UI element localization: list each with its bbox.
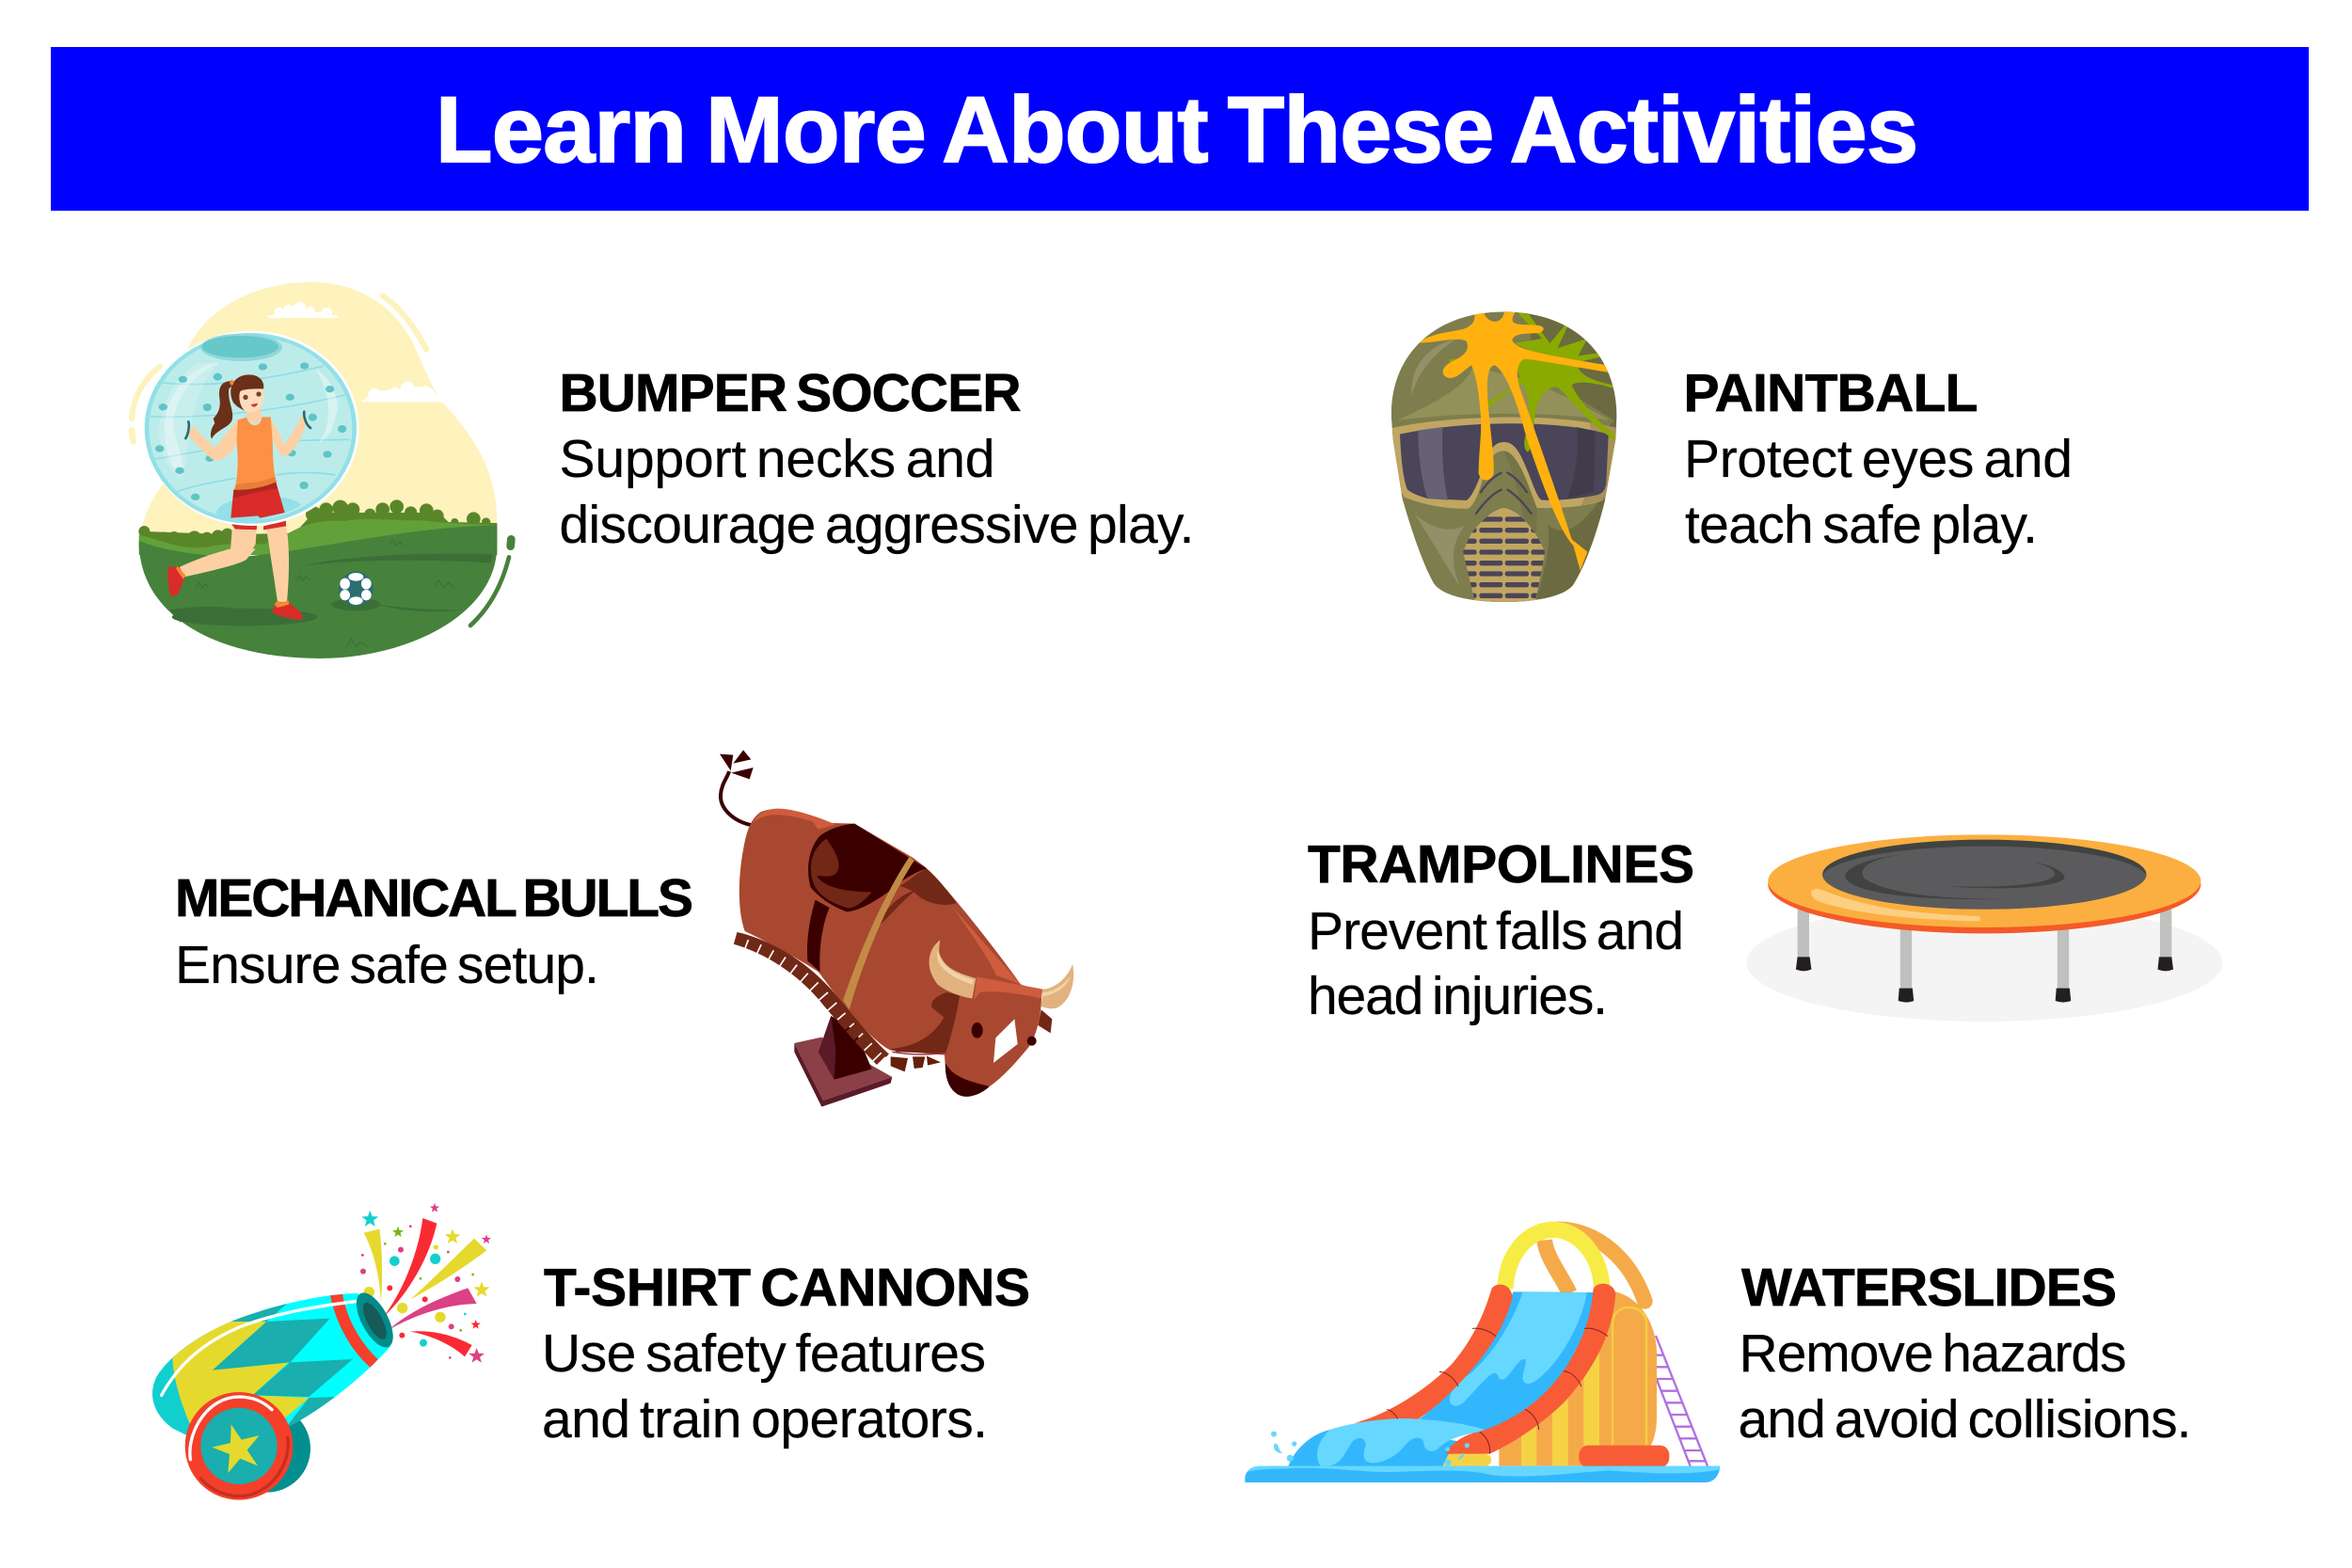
text: t-shirt cannons line 1: Use safety features: [542, 1323, 986, 1384]
text: trampolines line 2: head injuries.: [1308, 966, 1608, 1026]
heading: t-shirt cannons: T-SHIRT CANNONS: [544, 1258, 1030, 1318]
title: Learn More About These Activities: [436, 77, 1918, 182]
text: bumper soccer line 2: discourage aggressive play.: [559, 495, 1195, 555]
text: paintball line 1: Protect eyes and: [1684, 429, 2073, 489]
panel: mechanical bulls: [175, 750, 1073, 1107]
panel: paintball: [1385, 310, 2073, 602]
heading: trampolines: TRAMPOLINES: [1308, 834, 1694, 895]
panel: waterslides: [1245, 1229, 2192, 1482]
illustration: mechanical bull: [720, 750, 1073, 1107]
text: waterslides line 2: and avoid collisions.: [1739, 1389, 2192, 1449]
illustration: confetti cannon: [132, 1203, 491, 1500]
text: t-shirt cannons line 2: and train operators.: [542, 1389, 988, 1449]
title banner: [51, 47, 2309, 211]
heading: bumper soccer: BUMPER SOCCER: [559, 363, 1022, 423]
text: trampolines line 1: Prevent falls and: [1308, 901, 1684, 961]
text: waterslides line 1: Remove hazards: [1739, 1323, 2126, 1384]
heading: waterslides: WATERSLIDES: [1741, 1258, 2117, 1318]
panel: trampolines: [1308, 834, 2222, 1026]
panel: bumper soccer: [132, 282, 1194, 658]
illustration: inflatable waterslide: [1245, 1229, 1720, 1482]
text: paintball line 2: teach safe play.: [1685, 495, 2038, 555]
heading: mechanical bulls: MECHANICAL BULLS: [175, 868, 693, 928]
text: bumper soccer line 1: Support necks and: [559, 429, 995, 489]
illustration: paintball mask: [1385, 310, 1616, 602]
heading: paintball: PAINTBALL: [1684, 363, 1978, 423]
illustration: trampoline: [1746, 834, 2222, 1022]
illustration: girl in bubble playing soccer: [132, 282, 511, 658]
panel: t-shirt cannons: [132, 1203, 1030, 1500]
text: mechanical bulls: Ensure safe setup.: [175, 935, 599, 995]
